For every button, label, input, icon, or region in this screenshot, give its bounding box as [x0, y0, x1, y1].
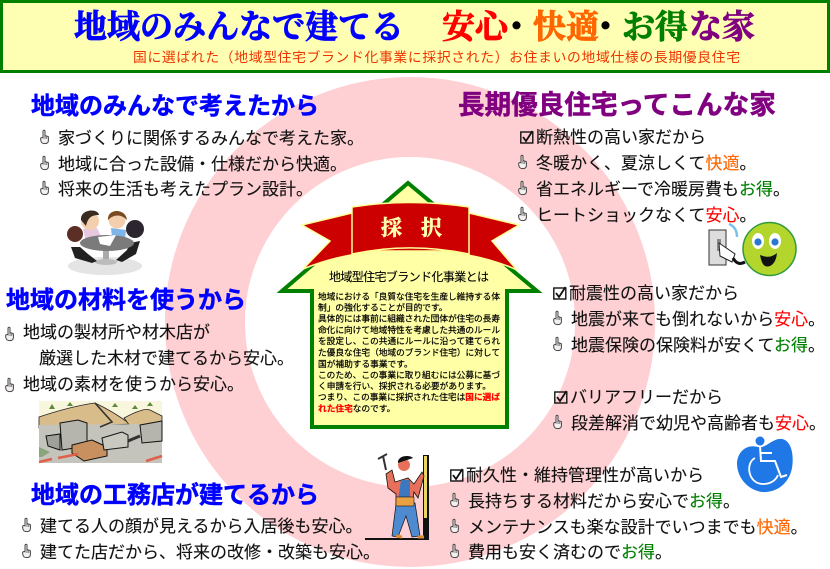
panel: local builder: [23, 454, 429, 562]
title: お得: [622, 9, 688, 46]
list: local builder: 建てた店だから、将来の改修・改築も安心。: [40, 543, 380, 562]
panel: durability: 費用も安く済むのでお得。: [468, 543, 672, 562]
list: local materials: [6, 323, 294, 394]
heading: local builder: 地域の工務店が建てるから: [31, 481, 319, 509]
house body text: 具体的には事前に組織された団体が住宅の長寿: [318, 312, 500, 324]
panel: earthquake resistance: 地震保険の保険料が安くてお得。: [571, 336, 825, 355]
title banner: [2, 2, 828, 72]
house panel: [282, 183, 537, 427]
house body text: 制」の強化することが目的です。: [318, 302, 447, 312]
house body text: た優良な住宅（地域のブランド住宅）に対して: [318, 346, 500, 358]
panel: barrier free: 段差解消で幼児や高齢者も安心。: [571, 414, 826, 433]
house body text: つまり、この事業に採択された住宅は国に選ば: [318, 391, 500, 402]
house heading: 地域型住宅ブランド化事業とは: [329, 269, 489, 284]
title: ・: [589, 10, 622, 46]
list: community planning: 地域に合った設備・仕様だから快適。: [58, 155, 347, 174]
heading: community planning: 地域のみんなで考えたから: [31, 93, 319, 120]
list: insulation: 省エネルギーで冷暖房費もお得。: [536, 180, 790, 199]
subtitle: 国に選ばれた（地域型住宅ブランド化事業に採択された）お住まいの地域仕様の長期優良住宅: [133, 49, 740, 65]
house body text: [318, 290, 500, 414]
panel: local materials: [6, 287, 294, 463]
icon: carpenter: [365, 454, 429, 540]
title: ・: [500, 10, 533, 46]
panel: durability: メンテナンスも楽な設計でいつまでも快適。: [468, 518, 808, 537]
heading: long-life quality house: 長期優良住宅ってこんな家: [458, 90, 776, 120]
panel: earthquake resistance: 耐震性の高い家だから: [569, 284, 739, 303]
list: community planning: 家づくりに関係するみんなで考えた家。: [58, 129, 364, 148]
list: local builder: 建てる人の顔が見えるから入居後も安心。: [40, 517, 362, 536]
list: insulation: 冬暖かく、夏涼しくて快適。: [536, 154, 756, 173]
list: local materials: 地域の素材を使うから安心。: [23, 374, 244, 394]
title: 安心: [442, 9, 513, 46]
pink ring background: [205, 117, 615, 527]
list: community planning: [41, 129, 364, 199]
ribbon: [302, 202, 519, 270]
icon: switch and smiley: [709, 222, 796, 276]
list: community planning: 将来の生活も考えたプラン設計。: [58, 180, 313, 199]
icon: wheelchair: [737, 436, 793, 492]
house body text: このため、この事業に取り組むには公募に基づ: [318, 369, 500, 380]
icon: meeting people: [67, 211, 144, 275]
list: local builder: [23, 517, 380, 562]
panel: long-life quality house: [458, 90, 796, 276]
panel: earthquake resistance: [554, 284, 825, 355]
list: local materials: 厳選した木材で建てるから安心。: [39, 349, 294, 368]
house body text: れた住宅なのです。: [318, 402, 395, 414]
panel: durability: [451, 466, 808, 562]
list: local materials: 地域の製材所や材木店が: [23, 323, 210, 342]
house body text: く申請を行い、採択される必要があります。: [318, 380, 491, 391]
panel: durability: 耐久性・維持管理性が高いから: [466, 466, 704, 485]
panel: barrier free: [554, 388, 826, 433]
ribbon label: 採: [381, 216, 402, 240]
list: insulation: [519, 128, 790, 225]
heading: local materials: 地域の材料を使うから: [6, 287, 246, 314]
panel: earthquake resistance: 地震が来ても倒れないから安心。: [571, 310, 825, 329]
house body text: 地域における「良質な住宅を生産し維持する体: [318, 290, 500, 302]
title: な家: [689, 9, 755, 46]
house body text: 命化に向けて地域特性を考慮した共通のルール: [318, 324, 500, 335]
house body text: を設定し、この共通にルールに沿って建てられ: [318, 335, 500, 346]
ribbon: 択: [421, 216, 442, 240]
title: 地域のみんなで建てる: [74, 9, 404, 46]
list: insulation: ヒートショックなくて安心。: [536, 206, 756, 225]
icon: factory landscape: [39, 401, 162, 463]
panel: durability: 長持ちする材料だから安心でお得。: [468, 492, 740, 511]
panel: community planning: [31, 93, 364, 275]
house body text: 国が補助する事業です。: [318, 358, 413, 369]
panel: barrier free: バリアフリーだから: [570, 388, 723, 407]
title: 快適: [533, 9, 599, 46]
list: insulation: 断熱性の高い家だから: [536, 128, 706, 147]
